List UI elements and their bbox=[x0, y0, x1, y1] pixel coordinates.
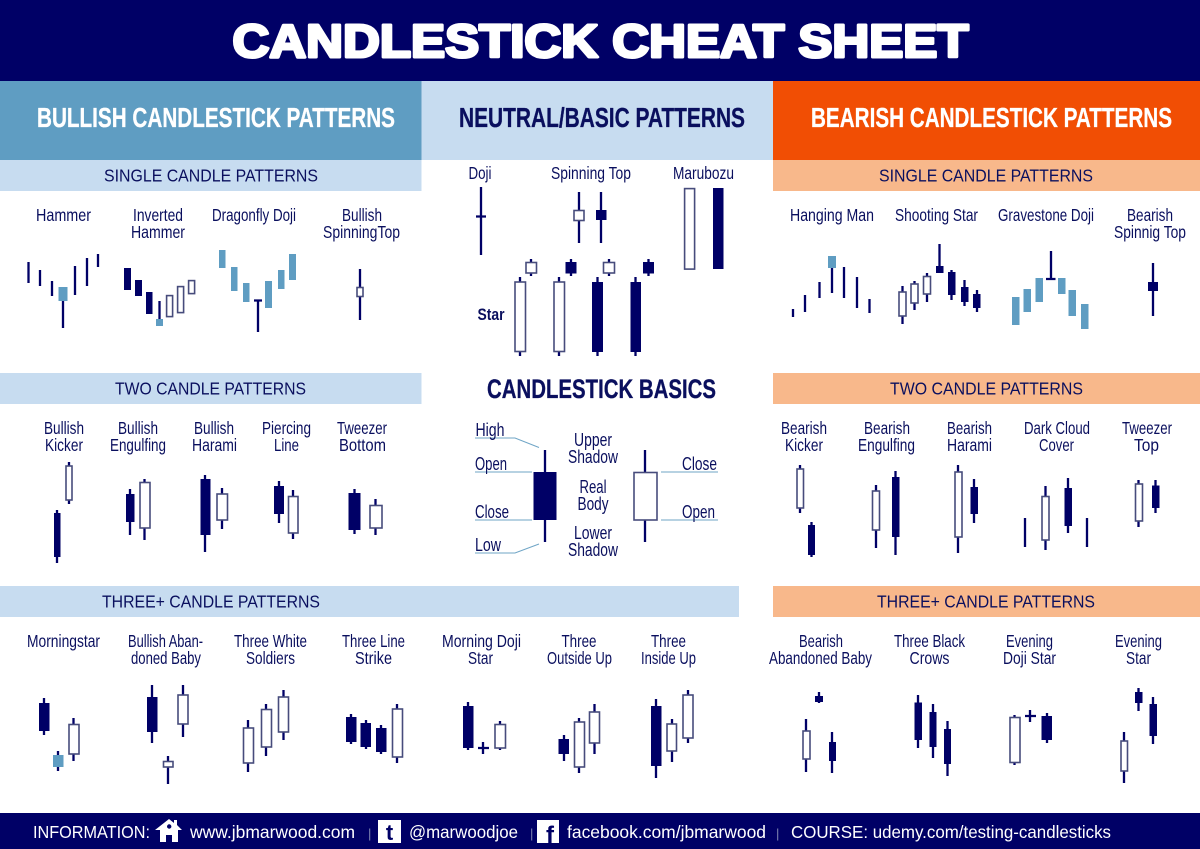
pattern: Inverted Hammer: Hammer bbox=[131, 222, 185, 242]
pattern: Bearish Engulfing: Engulfing bbox=[858, 435, 915, 455]
pattern: Doji: Doji bbox=[468, 163, 492, 183]
icon: twitter: t bbox=[386, 820, 394, 845]
pattern: Marubozu: Marubozu bbox=[673, 163, 734, 183]
pattern: Bearish Abandoned Baby: Bearish bbox=[799, 631, 843, 651]
pattern: Bullish Harami: Harami bbox=[192, 435, 237, 455]
pattern: Dark Cloud Cover: Dark Cloud bbox=[1024, 418, 1090, 438]
icon: twitter bbox=[378, 820, 401, 845]
pattern: Tweezer Bottom bbox=[337, 418, 387, 535]
pattern: Bearish Kicker bbox=[781, 418, 827, 557]
pattern: Gravestone Doji bbox=[998, 205, 1094, 329]
panel: bullish three+ candle patterns: THREE+ CANDLE PATTERNS bbox=[102, 592, 320, 612]
pattern: Star bbox=[478, 259, 654, 356]
panel: bearish single candle patterns bbox=[773, 160, 1200, 329]
pattern: Evening Star bbox=[1115, 631, 1162, 783]
panel: bullish header bbox=[0, 81, 422, 160]
pattern: Three Outside Up: Outside Up bbox=[547, 648, 612, 668]
pattern: Three Inside Up: Three bbox=[651, 631, 686, 651]
icon: facebook: f bbox=[546, 822, 555, 849]
icon: facebook bbox=[537, 820, 559, 849]
labels: shadow and body: Upper bbox=[574, 430, 612, 450]
pattern: Bullish Kicker: Bullish bbox=[44, 418, 84, 438]
pattern: Morning Doji Star bbox=[442, 631, 521, 754]
diagram: bearish candle anatomy: Open bbox=[475, 454, 507, 474]
pattern: Tweezer Top bbox=[1122, 418, 1172, 527]
panel: bullish single candle patterns bbox=[0, 160, 422, 332]
title banner bbox=[0, 0, 1200, 81]
footer bbox=[0, 813, 1200, 849]
footer: | bbox=[368, 826, 371, 841]
pattern: Shooting Star: Shooting Star bbox=[895, 205, 978, 225]
pattern: Tweezer Top: Top bbox=[1134, 435, 1159, 455]
pattern: Hanging Man: Hanging Man bbox=[790, 205, 874, 225]
panel: bullish two candle patterns: TWO CANDLE PATTERNS bbox=[115, 378, 306, 398]
panel: bullish header: BULLISH CANDLESTICK PATTERNS bbox=[37, 102, 395, 133]
pattern: Morning Doji Star: Morning Doji bbox=[442, 631, 521, 651]
pattern: Bullish Spinning Top: Bullish bbox=[342, 205, 382, 225]
pattern: Bearish Spinning Top bbox=[1114, 205, 1186, 316]
pattern: Shooting Star bbox=[895, 205, 980, 324]
panel: bullish two candle patterns bbox=[0, 373, 422, 563]
panel: neutral basic patterns bbox=[468, 163, 734, 356]
pattern: Bullish Engulfing bbox=[110, 418, 166, 540]
pattern: Three Outside Up: Three bbox=[562, 631, 596, 651]
pattern: Morningstar: Morningstar bbox=[27, 631, 100, 651]
labels: shadow and body: Shadow bbox=[568, 540, 619, 560]
pattern: Morning Doji Star: Star bbox=[468, 648, 493, 668]
pattern: Hammer bbox=[28, 205, 98, 328]
pattern: Bearish Harami bbox=[947, 418, 992, 553]
heading: candlestick basics: CANDLESTICK BASICS bbox=[487, 374, 716, 404]
pattern: Three Line Strike bbox=[342, 631, 405, 763]
pattern: Bullish Kicker bbox=[44, 418, 84, 563]
pattern: Three Black Crows bbox=[894, 631, 965, 776]
pattern: Tweezer Bottom: Tweezer bbox=[337, 418, 387, 438]
pattern: Piercing Line bbox=[262, 418, 311, 539]
pattern: Evening Star: Evening bbox=[1115, 631, 1162, 651]
title: CANDLESTICK CHEAT SHEET bbox=[232, 15, 968, 67]
labels: shadow and body: Body bbox=[578, 494, 608, 514]
panel: bearish header bbox=[773, 81, 1200, 160]
pattern: Dark Cloud Cover: Cover bbox=[1039, 435, 1074, 455]
pattern: Three Line Strike: Strike bbox=[355, 648, 392, 668]
pattern: Piercing Line: Line bbox=[274, 435, 299, 455]
pattern: Bullish Spinning Top: SpinningTop bbox=[323, 222, 400, 242]
pattern: Three Inside Up bbox=[641, 631, 696, 778]
pattern: Evening Doji Star: Evening bbox=[1006, 631, 1053, 651]
panel: bearish three+ candle patterns: THREE+ CANDLE PATTERNS bbox=[877, 592, 1095, 612]
footer: COURSE: udemy.com/testing-candlesticks bbox=[791, 822, 1111, 842]
pattern: Three White Soldiers bbox=[234, 631, 307, 772]
pattern: Three Inside Up: Inside Up bbox=[641, 648, 696, 668]
pattern: Three Line Strike: Three Line bbox=[342, 631, 405, 651]
diagram: bullish candle anatomy bbox=[634, 450, 718, 542]
pattern: Tweezer Top: Tweezer bbox=[1122, 418, 1172, 438]
pattern: Evening Doji Star bbox=[1003, 631, 1056, 765]
pattern: Morningstar bbox=[27, 631, 100, 771]
pattern: Inverted Hammer bbox=[124, 205, 195, 326]
pattern: Evening Star: Star bbox=[1126, 648, 1151, 668]
pattern: Three White Soldiers: Soldiers bbox=[246, 648, 295, 668]
pattern: Bullish Abandoned Baby: doned Baby bbox=[131, 648, 201, 668]
panel: bullish single candle patterns: SINGLE CANDLE PATTERNS bbox=[104, 166, 318, 186]
pattern: Star: Star bbox=[478, 305, 505, 324]
pattern: Three Black Crows: Crows bbox=[910, 648, 950, 668]
pattern: Tweezer Bottom: Bottom bbox=[339, 435, 386, 455]
pattern: Gravestone Doji: Gravestone Doji bbox=[998, 205, 1094, 225]
labels: shadow and body: Real bbox=[580, 477, 606, 497]
pattern: Inverted Hammer: Inverted bbox=[133, 205, 183, 225]
pattern: Bearish Abandoned Baby: Abandoned Baby bbox=[769, 648, 872, 668]
diagram: bearish candle anatomy bbox=[475, 420, 556, 555]
pattern: Spinning Top bbox=[551, 163, 631, 243]
footer: www.jbmarwood.com bbox=[189, 822, 355, 842]
panel: bullish three+ candle patterns bbox=[0, 586, 739, 784]
footer: | bbox=[530, 826, 533, 841]
diagram: bearish candle anatomy: Close bbox=[475, 502, 509, 522]
panel: neutral header: NEUTRAL/BASIC PATTERNS bbox=[459, 102, 745, 133]
pattern: Dragonfly Doji bbox=[212, 205, 296, 332]
diagram: bullish candle anatomy: Open bbox=[682, 502, 715, 522]
labels: shadow and body bbox=[568, 430, 619, 560]
pattern: Hanging Man bbox=[790, 205, 874, 317]
pattern: Hammer: Hammer bbox=[36, 205, 91, 225]
panel: bearish three+ candle patterns bbox=[769, 586, 1200, 783]
pattern: Bearish Kicker: Kicker bbox=[785, 435, 823, 455]
panel: neutral header bbox=[422, 81, 773, 160]
pattern: Bullish Spinning Top bbox=[323, 205, 400, 320]
pattern: Bullish Harami: Bullish bbox=[194, 418, 234, 438]
footer: facebook.com/jbmarwood bbox=[567, 822, 766, 842]
panel: bearish single candle patterns: SINGLE CANDLE PATTERNS bbox=[879, 166, 1093, 186]
pattern: Bearish Kicker: Bearish bbox=[781, 418, 827, 438]
pattern: Bearish Harami: Harami bbox=[947, 435, 992, 455]
pattern: Dark Cloud Cover bbox=[1024, 418, 1090, 550]
pattern: Piercing Line: Piercing bbox=[262, 418, 311, 438]
pattern: Dragonfly Doji: Dragonfly Doji bbox=[212, 205, 296, 225]
diagram: bearish candle anatomy: High bbox=[476, 420, 504, 440]
pattern: Bearish Spinning Top: Bearish bbox=[1127, 205, 1173, 225]
diagram: bearish candle anatomy: Low bbox=[475, 535, 502, 555]
diagram: bullish candle anatomy: Close bbox=[682, 454, 717, 474]
pattern: Bullish Harami bbox=[192, 418, 237, 552]
footer: @marwoodjoe bbox=[409, 822, 518, 842]
pattern: Bullish Engulfing: Engulfing bbox=[110, 435, 166, 455]
labels: shadow and body: Lower bbox=[574, 523, 612, 543]
panel: bearish two candle patterns bbox=[773, 373, 1200, 557]
pattern: Bearish Engulfing bbox=[858, 418, 915, 555]
pattern: Three Black Crows: Three Black bbox=[894, 631, 965, 651]
pattern: Bullish Abandoned Baby bbox=[128, 631, 203, 784]
pattern: Evening Doji Star: Doji Star bbox=[1003, 648, 1056, 668]
pattern: Doji bbox=[468, 163, 492, 255]
pattern: Bearish Abandoned Baby bbox=[769, 631, 872, 773]
pattern: Bullish Kicker: Kicker bbox=[45, 435, 83, 455]
pattern: Marubozu bbox=[673, 163, 734, 269]
pattern: Bullish Abandoned Baby: Bullish Aban- bbox=[128, 631, 203, 651]
pattern: Bearish Engulfing: Bearish bbox=[864, 418, 910, 438]
pattern: Bearish Harami: Bearish bbox=[947, 418, 992, 438]
panel: bearish two candle patterns: TWO CANDLE PATTERNS bbox=[890, 378, 1083, 398]
pattern: Spinning Top: Spinning Top bbox=[551, 163, 631, 183]
footer: INFORMATION: bbox=[33, 822, 150, 842]
icon: house bbox=[155, 819, 182, 842]
pattern: Three White Soldiers: Three White bbox=[234, 631, 307, 651]
pattern: Three Outside Up bbox=[547, 631, 612, 773]
pattern: Bullish Engulfing: Bullish bbox=[118, 418, 158, 438]
panel: candlestick basics bbox=[475, 374, 718, 560]
labels: shadow and body: Shadow bbox=[568, 447, 619, 467]
footer: | bbox=[776, 826, 779, 841]
